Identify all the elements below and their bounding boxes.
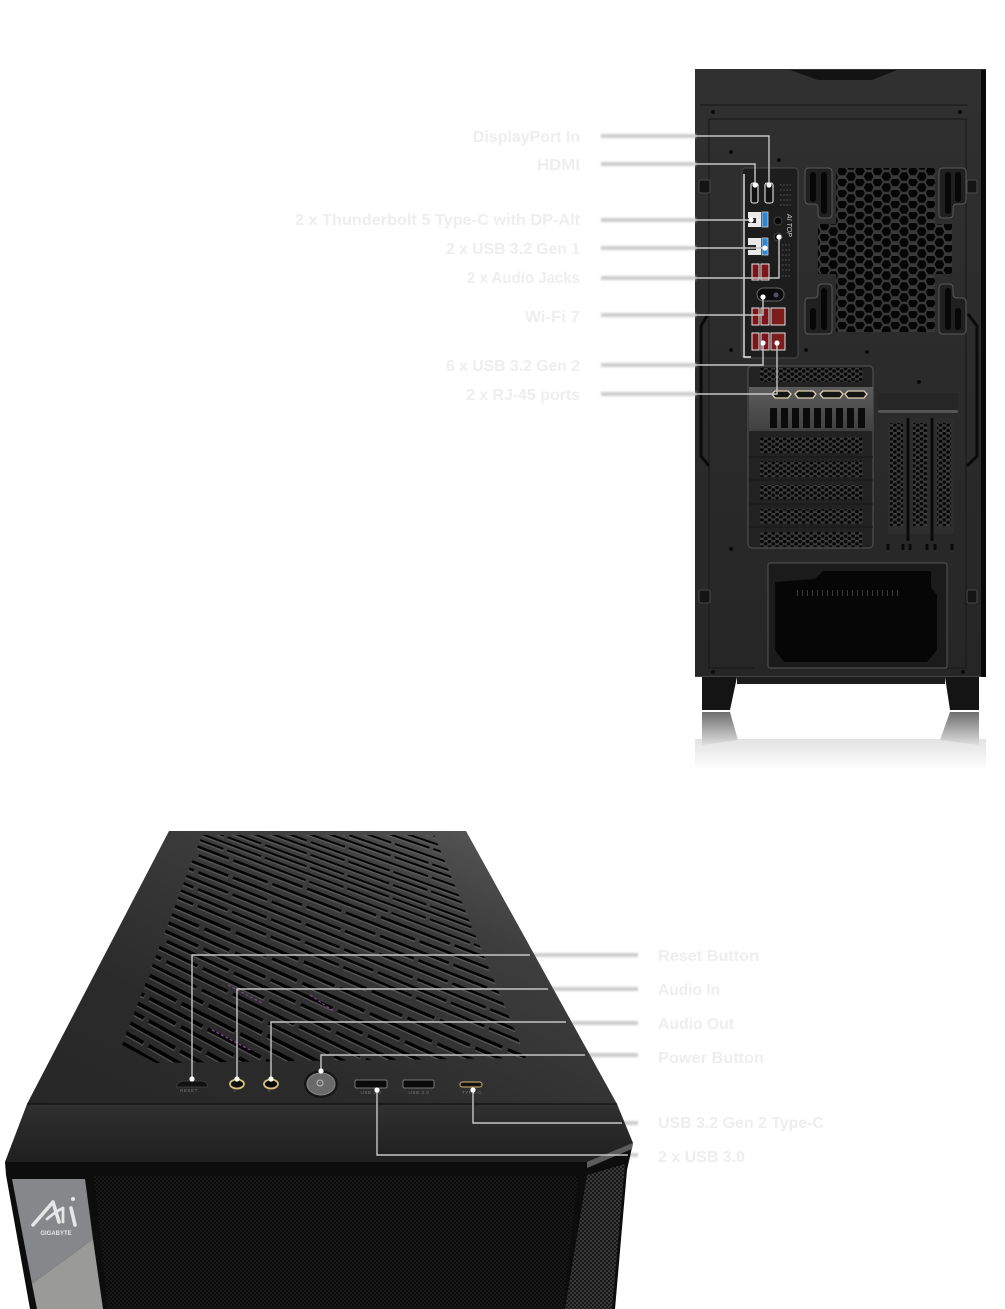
callout: USB 3.2 Gen 1: 2 x USB 3.2 Gen 1 (446, 241, 580, 258)
side rails (701, 314, 977, 466)
callout: DisplayPort In: DisplayPort In (473, 129, 580, 146)
AI TOP logo text: AI TOP (785, 213, 792, 237)
callout: USB 3.2 Gen 2 (446, 340, 766, 375)
callout: Wi-Fi 7: Wi-Fi 7 (525, 309, 580, 326)
expansion slot panel (748, 366, 873, 548)
RJ-45 ports (771, 308, 785, 350)
I/O panel (742, 168, 798, 358)
GPU bracket (749, 387, 873, 431)
USB Type-C port: TYPE-C (462, 1090, 482, 1095)
slot dividers (908, 418, 932, 541)
case screws (711, 110, 965, 674)
panel: rear view of PC case (695, 69, 986, 770)
slot tabs (888, 544, 952, 550)
DisplayPort and HDMI ports (751, 183, 773, 203)
front bezel band (5, 1104, 633, 1162)
callout: Audio In: Audio In (658, 982, 720, 999)
I/O shield bracket (744, 174, 751, 357)
vertical GPU slots (878, 393, 958, 550)
fan mount slots (805, 168, 966, 334)
right bezel highlight (587, 1143, 633, 1168)
reset button (176, 1081, 208, 1093)
callout: Thunderbolt (295, 212, 754, 229)
USB 3.0 ports: USB 3.0 (361, 1090, 381, 1095)
GIGABYTE wordmark: GIGABYTE (40, 1231, 72, 1237)
callout: Audio Out (268, 1016, 735, 1082)
callout: USB 3.2 Gen 2 Type-C: USB 3.2 Gen 2 Type-C (658, 1115, 824, 1132)
Thunderbolt ports (748, 212, 761, 255)
power supply bay (768, 563, 947, 668)
callout: RJ-45 ports: 2 x RJ-45 ports (466, 387, 580, 404)
USB 3.0 ports (355, 1080, 434, 1095)
right edge strip (981, 70, 986, 677)
dot grid (780, 185, 791, 276)
callout: RJ-45 ports (466, 340, 780, 404)
audio out jack (264, 1080, 278, 1093)
front mesh (94, 1176, 578, 1309)
callout: DisplayPort In (473, 129, 772, 188)
rear fan honeycomb (818, 168, 952, 332)
callout: USB 3.2 Gen 2: 6 x USB 3.2 Gen 2 (446, 358, 580, 375)
callout: 2 x USB 3.0 (374, 1087, 745, 1166)
floor reflection (695, 712, 986, 770)
callout: USB 3.2 Gen 1 (446, 241, 768, 258)
callout: Wi-Fi 7 (525, 294, 766, 326)
PSU fins (797, 590, 900, 596)
icon: AI logo mark (33, 1197, 75, 1225)
USB 3.0 ports: USB 3.0 (409, 1090, 429, 1095)
slot vents (760, 368, 863, 547)
callout: 2 x USB 3.0: 2 x USB 3.0 (658, 1149, 745, 1166)
audio in jack (230, 1080, 244, 1093)
top surface (27, 831, 617, 1104)
GPU vents (770, 408, 865, 428)
slot dividers (749, 457, 873, 527)
callout: Reset Button (189, 948, 759, 1082)
top seams (695, 105, 981, 676)
callout: Audio Jacks (467, 234, 782, 287)
callout: Thunderbolt: 2 x Thunderbolt 5 Type-C with DP-Alt (295, 212, 581, 229)
blurred leader tails (530, 955, 638, 1155)
audio jacks (774, 217, 782, 241)
callout: Power Button: Power Button (658, 1050, 764, 1067)
audio out jack: ♫ (267, 1088, 271, 1093)
callout: Audio Jacks: 2 x Audio Jacks (467, 270, 580, 287)
callout: USB 3.2 Gen 2 Type-C (470, 1087, 824, 1132)
callout: Audio In (234, 982, 720, 1082)
callout: HDMI: HDMI (537, 157, 580, 174)
vent grille (122, 835, 526, 1063)
case feet (702, 677, 979, 710)
grey front plate (12, 1179, 103, 1309)
red USB 3.2 Gen 2 ports (752, 264, 769, 350)
top handle notch (790, 70, 897, 80)
USB 3.2 Gen 1 blue ports (762, 212, 768, 255)
audio in jack: ♪ (234, 1088, 236, 1093)
power button (304, 1070, 338, 1098)
reset button: RESET (180, 1088, 198, 1093)
callout: Power Button (318, 1050, 764, 1074)
USB Type-C port (460, 1082, 482, 1095)
callout: Reset Button: Reset Button (658, 948, 759, 965)
RGB glow (212, 985, 335, 1050)
thumb screws (699, 180, 977, 603)
retention bar (878, 410, 958, 413)
GPU display ports (772, 391, 867, 398)
callout: HDMI (537, 157, 758, 188)
case body (695, 69, 986, 677)
side mesh (565, 1164, 625, 1309)
panel: top view of PC case (5, 831, 639, 1309)
front black strip (5, 1143, 633, 1309)
antenna connectors (757, 288, 784, 301)
callout: Audio Out: Audio Out (658, 1016, 735, 1033)
